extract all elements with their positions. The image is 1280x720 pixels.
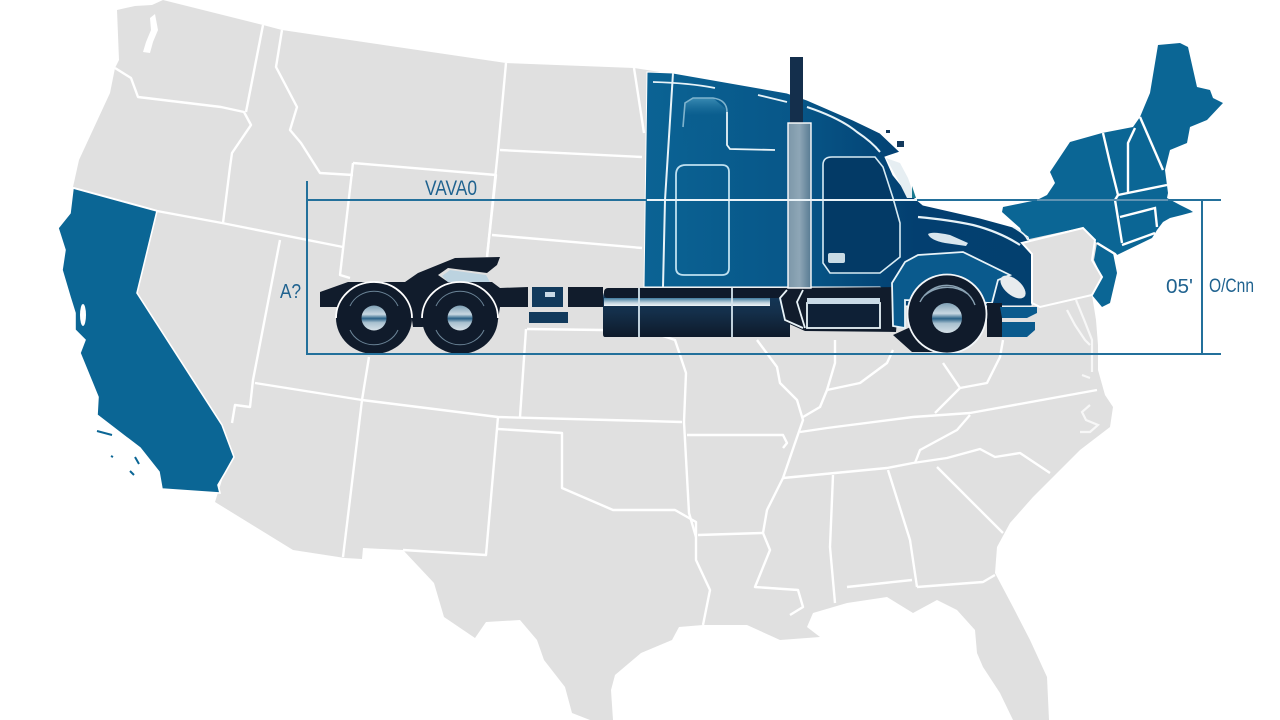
chesapeake and coastal inlets [1067, 300, 1098, 432]
rear frame section [568, 287, 603, 307]
front wheel [893, 274, 986, 354]
bumper [987, 303, 1037, 337]
rear wheel 2 [422, 282, 498, 354]
sleeper window panel [683, 98, 727, 147]
rear wheel 1 [336, 282, 412, 354]
fuel tank [603, 288, 790, 337]
dimension label: left: A? [280, 281, 301, 303]
dimension label: top: VAVA0 [425, 177, 477, 200]
hood marker light [928, 233, 968, 246]
dimension frame [307, 181, 1221, 354]
front fender [892, 252, 1010, 328]
cab step assembly [780, 287, 900, 332]
cab detail lines [653, 73, 1028, 287]
sleeper panel [676, 165, 729, 275]
headlight [996, 271, 1030, 303]
dimension label: height unit: O/Cnn [1209, 276, 1254, 297]
door panel [823, 157, 900, 273]
frame box [532, 287, 563, 307]
state borders [73, 25, 1097, 625]
pennsylvania overlapping the hood [1022, 228, 1102, 307]
door handle [828, 253, 845, 263]
state highlight: California [58, 188, 234, 493]
northeast state lines [1097, 117, 1167, 258]
truck [320, 57, 1037, 354]
mirrors [886, 130, 904, 147]
lower box [529, 312, 568, 323]
exhaust stack [790, 57, 803, 123]
truck chassis [320, 257, 528, 327]
truck cab [644, 72, 1032, 306]
dimension label: height value: 05' [1166, 276, 1193, 298]
windshield [886, 158, 915, 198]
state highlight: Northeast [1002, 43, 1223, 307]
